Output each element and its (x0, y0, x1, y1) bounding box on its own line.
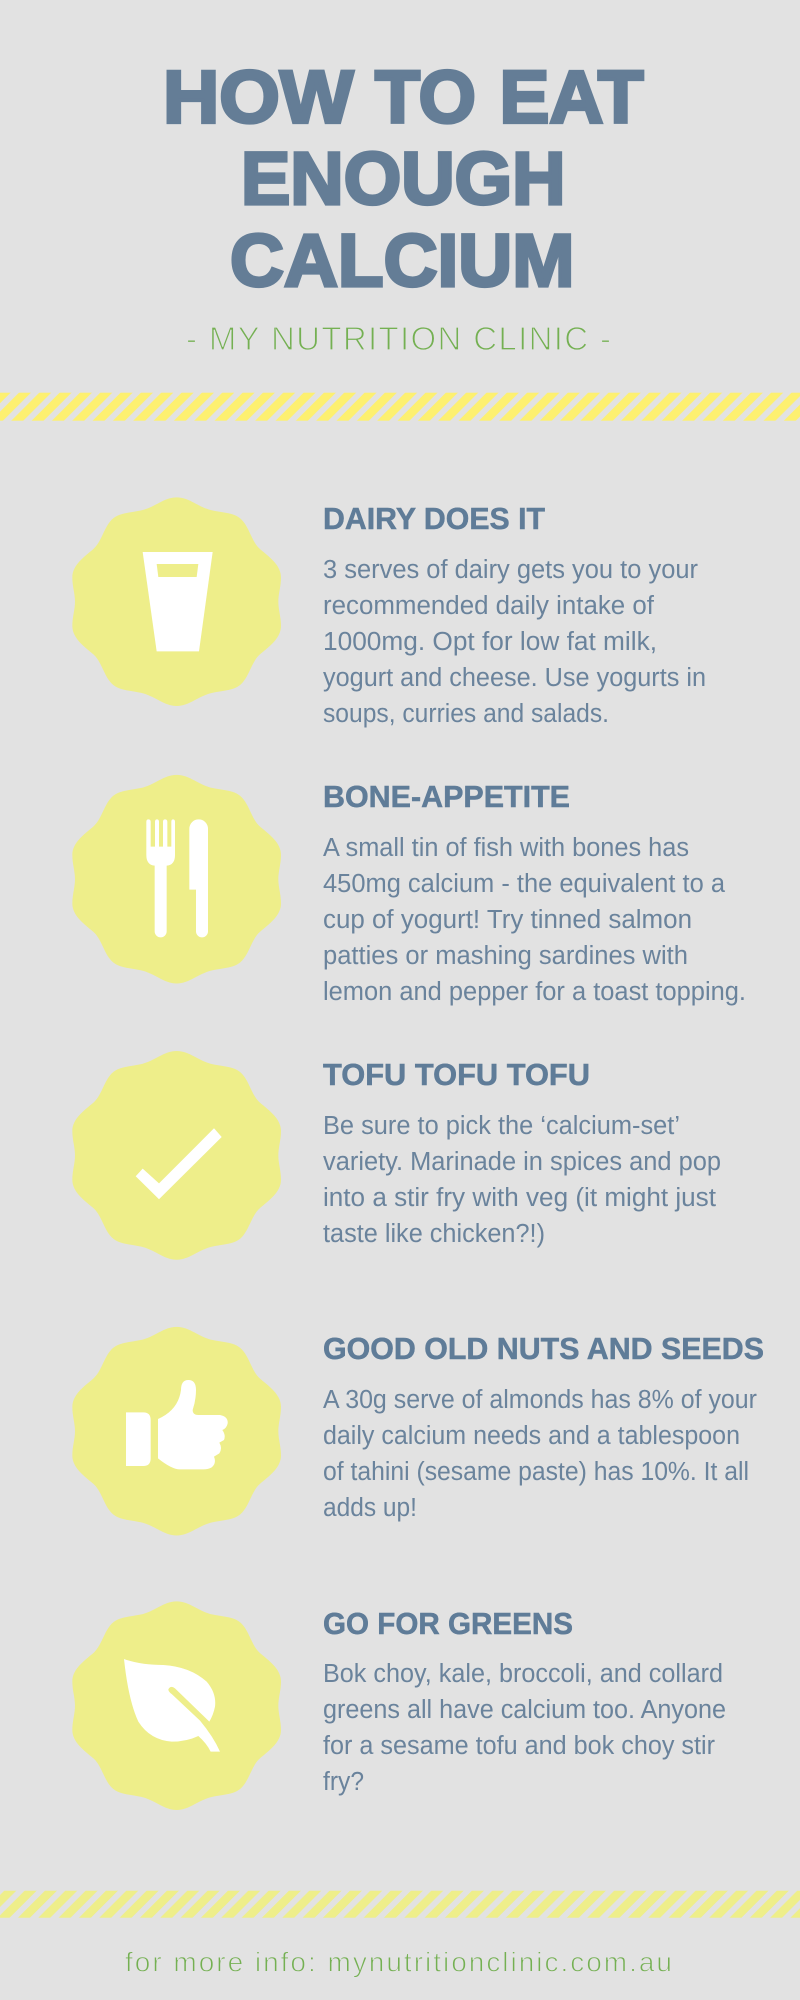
text block: greens: greens all have calcium too. Anyone (323, 1696, 726, 1724)
heading: bone-appetite: BONE-APPETITE (323, 780, 570, 814)
panel: good old nuts and seeds (72, 1327, 764, 1535)
text block: dairy (323, 556, 706, 728)
panel: dairy does it (72, 497, 706, 728)
icon: leaf (72, 1601, 281, 1810)
title: HOW (163, 55, 354, 138)
text block: nuts and seeds: of tahini (sesame paste) has 10%. It all (323, 1458, 749, 1486)
title: CALCIUM (230, 219, 574, 302)
heading: dairy does it: DAIRY DOES IT (323, 502, 545, 536)
footer link: for more info: mynutritionclinic.com.au (125, 1947, 672, 1978)
icon: check mark (72, 1051, 281, 1260)
text block: dairy: 1000mg. Opt for low fat milk, (323, 628, 657, 656)
bottom striped band (0, 1891, 800, 1918)
text block: tofu (323, 1112, 721, 1248)
text block: greens: fry? (323, 1768, 364, 1796)
title (163, 55, 644, 302)
text block: nuts and seeds: daily calcium needs and a tablespoon (323, 1422, 740, 1450)
icon: glass of milk (72, 497, 281, 706)
heading: good old nuts and seeds: GOOD OLD NUTS AND SEEDS (323, 1332, 764, 1366)
text block: tofu: taste like chicken?!) (323, 1220, 545, 1248)
text block: greens: for a sesame tofu and bok choy stir (323, 1732, 715, 1760)
text block: greens (323, 1660, 726, 1796)
title: EAT (500, 55, 644, 138)
text block: bone-appetite: lemon and pepper for a toast topping. (323, 978, 746, 1006)
text block: bone-appetite: 450mg calcium - the equivalent to a (323, 870, 726, 898)
title: TO (375, 55, 476, 138)
text block: tofu: variety. Marinade in spices and pop (323, 1148, 721, 1176)
text block: dairy: yogurt and cheese. Use yogurts in (323, 664, 706, 692)
text block: bone-appetite: A small tin of fish with bones has (323, 834, 689, 862)
subtitle: - MY NUTRITION CLINIC - (186, 320, 611, 357)
text block: dairy: soups, curries and salads. (323, 700, 609, 728)
panel: tofu tofu tofu (72, 1051, 721, 1260)
icon: thumbs up (72, 1327, 281, 1535)
text block: tofu: into a stir fry with veg (it might just (323, 1184, 716, 1212)
text block: dairy: 3 serves of dairy gets you to your (323, 556, 699, 584)
icon: knife and fork (72, 775, 281, 983)
panel: bone-appetite (72, 775, 746, 1006)
title: ENOUGH (241, 137, 566, 220)
panel: go for greens (72, 1601, 726, 1810)
text block: nuts and seeds: A 30g serve of almonds has 8% of your (323, 1386, 757, 1414)
text block: nuts and seeds: adds up! (323, 1494, 417, 1522)
text block: tofu: Be sure to pick the ‘calcium-set’ (323, 1112, 680, 1140)
top striped band (0, 393, 800, 421)
heading: tofu tofu tofu: TOFU TOFU TOFU (323, 1058, 590, 1092)
heading: go for greens: GO FOR GREENS (323, 1607, 573, 1641)
text block: nuts and seeds (323, 1386, 757, 1522)
text block: greens: Bok choy, kale, broccoli, and collard (323, 1660, 723, 1688)
text block: bone-appetite: cup of yogurt! Try tinned salmon (323, 906, 692, 934)
text block: dairy: recommended daily intake of (323, 592, 655, 620)
text block: bone-appetite: patties or mashing sardines with (323, 942, 688, 970)
text block: bone-appetite (323, 834, 746, 1006)
